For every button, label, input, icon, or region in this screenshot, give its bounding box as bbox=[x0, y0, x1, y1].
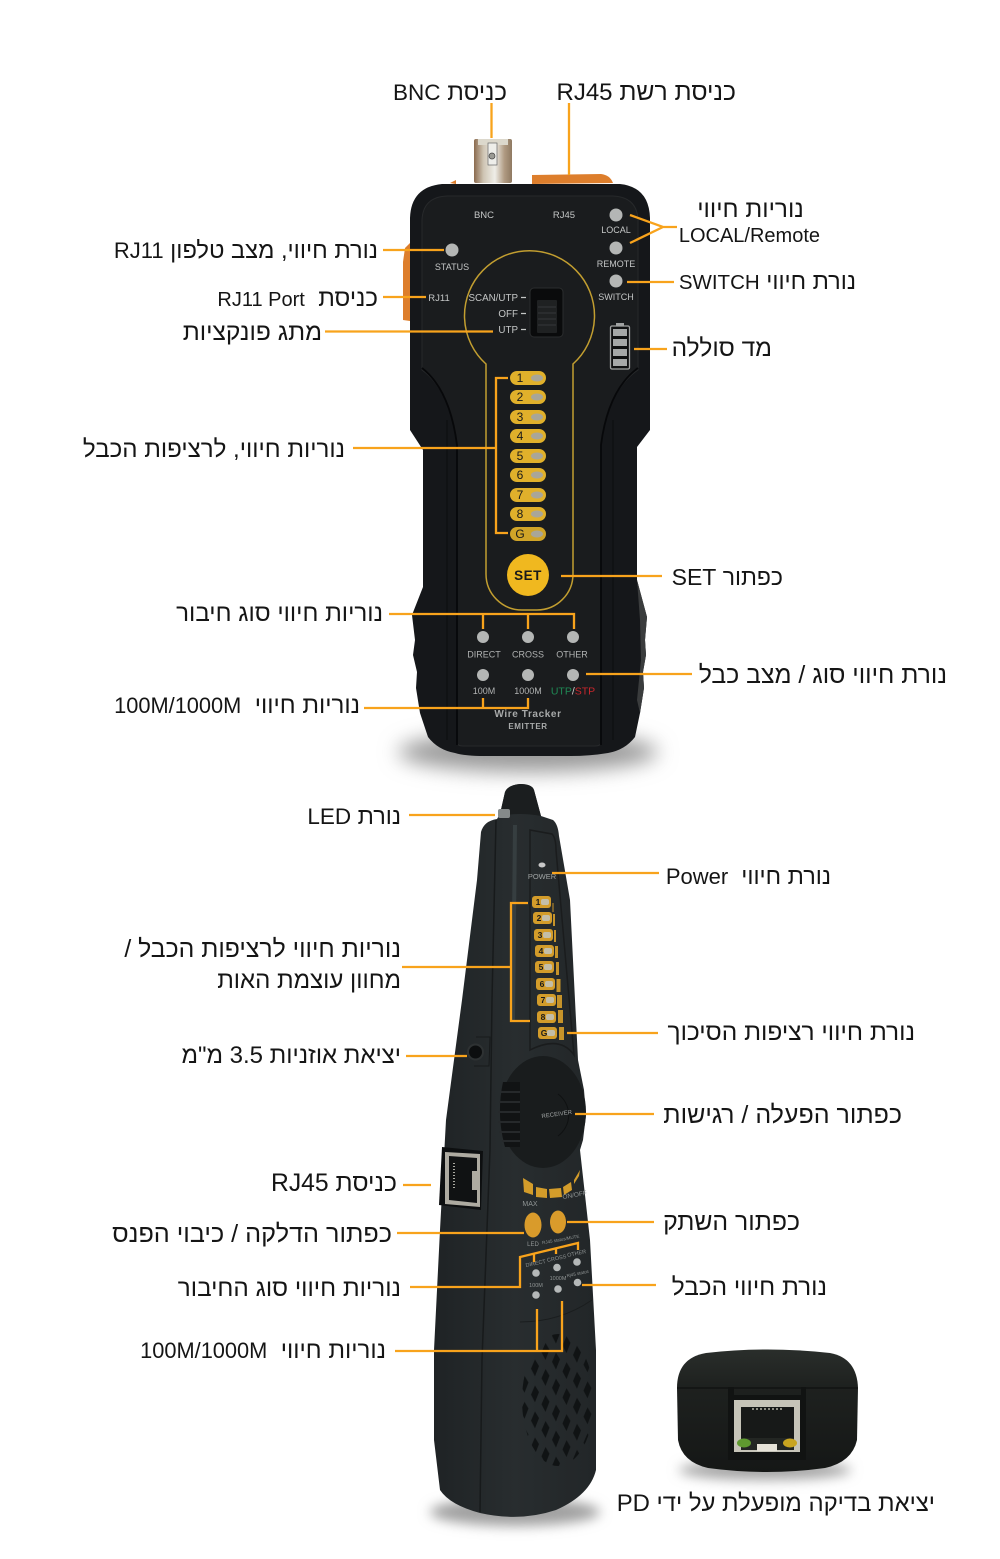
SET button bbox=[507, 554, 549, 596]
battery gauge bbox=[610, 323, 630, 369]
label: PD test output: יציאת בדיקה מופעלת על ידי PD bbox=[617, 1490, 935, 1516]
receiver control labels: 1000M bbox=[550, 1276, 567, 1282]
receiver control labels: ON/OFF bbox=[562, 1190, 587, 1201]
device labels: top: REMOTE bbox=[597, 259, 635, 269]
indicators: top LEDs bbox=[446, 208, 622, 288]
continuity LED pills: 2 bbox=[517, 390, 524, 404]
continuity LED pills: 1 bbox=[517, 371, 524, 385]
continuity LED pills: 3 bbox=[517, 410, 524, 424]
receiver control labels: CROSS bbox=[547, 1254, 567, 1264]
label: function switch: מתג פונקציות bbox=[183, 318, 322, 346]
receiver control labels: Rj45 status bbox=[566, 1269, 590, 1278]
label: cable continuity LEDs: נוריות חיווי, לרציפות הכבל bbox=[83, 436, 345, 462]
receiver control labels bbox=[522, 1190, 590, 1289]
label: power and sensitivity dial: כפתור הפעלה / רגישות bbox=[663, 1100, 902, 1128]
power dial: RECEIVER bbox=[541, 1110, 573, 1120]
body bbox=[410, 184, 650, 756]
label: SET button: כפתור SET bbox=[672, 564, 783, 590]
label: LED lamp: נורת LED bbox=[307, 802, 401, 828]
receiver LED pills: 4 bbox=[539, 946, 544, 956]
receiver LED pills: G bbox=[541, 1028, 548, 1038]
power dial bbox=[498, 1056, 586, 1168]
leader: receiver 100M/1000M bbox=[395, 1301, 562, 1351]
display plate bbox=[530, 830, 574, 1055]
device labels: top: SCAN/UTP bbox=[468, 293, 518, 304]
receiver LED pills: 7 bbox=[541, 995, 546, 1005]
signal strength bars bbox=[552, 903, 564, 1040]
label: LOCAL/Remote LEDs bbox=[679, 196, 820, 246]
device labels: top bbox=[428, 210, 635, 336]
receiver control labels: LED bbox=[527, 1242, 540, 1248]
leader: RJ45 network bbox=[568, 103, 570, 175]
receiver LED pills bbox=[532, 896, 557, 1039]
receiver LED pills: 8 bbox=[541, 1012, 546, 1022]
leader: receiver connection type bbox=[410, 1243, 578, 1287]
device labels: top: BNC bbox=[474, 210, 494, 221]
device labels: bottom: CROSS bbox=[512, 650, 544, 660]
receiver LED pills: 3 bbox=[538, 930, 543, 940]
leader: SWITCH bbox=[627, 281, 674, 283]
continuity LED pills bbox=[510, 371, 546, 541]
leader: receiver continuity bbox=[402, 903, 530, 1021]
device labels: top: STATUS bbox=[435, 262, 469, 272]
device: wire tracker receiver bbox=[430, 784, 600, 1526]
leader: receiver RJ45 bbox=[403, 1184, 431, 1186]
label: connection type LEDs: נוריות חיווי סוג החיבור bbox=[178, 1274, 401, 1302]
receiver LED pills: 1 bbox=[536, 897, 541, 907]
headphone jack bbox=[468, 1037, 490, 1066]
device labels: bottom bbox=[467, 650, 595, 731]
label: SWITCH LED: נורת חיווי SWITCH bbox=[679, 268, 856, 294]
leader: connection type bbox=[389, 614, 574, 629]
device labels: top: UTP bbox=[498, 325, 518, 336]
label: connection type LEDs: נוריות חיווי סוג חיבור bbox=[176, 600, 383, 626]
continuity LED pills: 4 bbox=[517, 429, 524, 443]
device labels: top: SWITCH bbox=[598, 292, 634, 302]
label: flashlight button: כפתור הדלקה / כיבוי הפנס bbox=[112, 1220, 392, 1248]
label: continuity and signal strength bbox=[124, 936, 401, 994]
receiver LED pills: 6 bbox=[540, 979, 545, 989]
leader: LED bbox=[409, 814, 495, 816]
label: continuity and signal strength: מחוון עוצמת האות bbox=[217, 966, 401, 994]
label: RJ45 network port: כניסת רשת RJ45 bbox=[556, 78, 736, 106]
panel line bbox=[480, 820, 496, 1512]
receiver control labels: OTHER bbox=[567, 1249, 587, 1259]
label: continuity and signal strength: נוריות חיווי לרציפות הכבל / bbox=[124, 936, 401, 962]
device labels: bottom: OTHER bbox=[556, 650, 588, 660]
label: RJ11 port: כניסת RJ11 Port bbox=[217, 284, 378, 312]
leader: mute bbox=[567, 1221, 654, 1223]
device labels: bottom: Wire Tracker bbox=[494, 709, 562, 720]
leader: headphone bbox=[406, 1055, 467, 1057]
receiver control labels: 100M bbox=[529, 1283, 543, 1289]
leader: LED button bbox=[397, 1232, 524, 1234]
power LED: POWER bbox=[528, 872, 557, 881]
label: cable type and state LED: נורת חיווי סוג / מצב כבל bbox=[699, 662, 947, 688]
label: RJ45 port: כניסת RJ45 bbox=[271, 1170, 397, 1196]
leader: RJ11 port bbox=[383, 296, 426, 298]
volume arc bbox=[523, 1170, 580, 1198]
leader: receiver cable bbox=[582, 1284, 656, 1286]
leader: RJ11 status bbox=[383, 249, 444, 251]
leader: cable state bbox=[586, 673, 692, 675]
device: PD test unit bbox=[677, 1350, 858, 1480]
receiver LEDs bbox=[532, 1258, 581, 1299]
power LED bbox=[528, 862, 557, 881]
device labels: bottom: 100M bbox=[473, 686, 495, 696]
continuity LED pills: G bbox=[515, 527, 525, 541]
leader: shield continuity bbox=[567, 1032, 658, 1034]
label: mute button: כפתור השתק bbox=[663, 1208, 800, 1236]
body bbox=[434, 784, 596, 1517]
label: battery gauge: מד סוללה bbox=[672, 334, 772, 362]
receiver control labels: RJ45 status/MUTE bbox=[542, 1234, 580, 1245]
device: wire tracker emitter bbox=[398, 139, 658, 772]
leader: battery bbox=[634, 348, 667, 350]
label: receiver 100M/1000M LEDs: נוריות חיווי 100M/1000M bbox=[140, 1336, 386, 1364]
device labels: top: LOCAL bbox=[601, 225, 631, 235]
leader: BNC bbox=[490, 103, 493, 138]
continuity LED pills: 5 bbox=[517, 449, 524, 463]
receiver LED pills: 2 bbox=[537, 913, 542, 923]
continuity LED pills: 8 bbox=[517, 507, 524, 521]
leader: Power bbox=[552, 872, 659, 874]
outline: gold keyhole bbox=[465, 251, 594, 610]
leader: SET bbox=[561, 575, 662, 577]
connector: RJ11 orange cap bbox=[403, 243, 410, 321]
label: Power LED: נורת חיווי Power bbox=[666, 862, 831, 888]
label: LOCAL/Remote LEDs: נוריות חיווי bbox=[697, 196, 804, 222]
device labels: bottom: EMITTER bbox=[508, 722, 548, 731]
label: headphone output: יציאת אוזניות 3.5 מ"מ bbox=[181, 1042, 401, 1068]
receiver control labels: MAX bbox=[522, 1201, 538, 1208]
continuity LED pills: 6 bbox=[517, 468, 524, 482]
device labels: top: RJ45 bbox=[553, 210, 575, 221]
RJ45 side port bbox=[439, 1147, 483, 1210]
buttons: LED and mute bbox=[524, 1210, 566, 1238]
device labels: bottom: UTP/STP bbox=[551, 686, 595, 698]
connector: RJ45 orange cap bbox=[450, 174, 613, 184]
receiver control labels: DIRECT bbox=[525, 1259, 547, 1269]
device labels: bottom: DIRECT bbox=[467, 650, 501, 660]
port bbox=[728, 1387, 806, 1460]
label: cable LED: נורת חיווי הכבל bbox=[672, 1274, 827, 1300]
label: BNC port: כניסת BNC bbox=[393, 78, 507, 106]
receiver LED pills: 5 bbox=[539, 962, 544, 972]
function switch bbox=[521, 288, 563, 337]
SET button: SET bbox=[514, 568, 542, 583]
continuity LED pills: 7 bbox=[517, 488, 524, 502]
leader: power dial bbox=[575, 1113, 654, 1115]
indicators: bottom LEDs bbox=[477, 631, 579, 681]
device labels: top: OFF bbox=[498, 309, 518, 320]
device labels: top: RJ11 bbox=[428, 293, 450, 304]
leader: continuity bracket bbox=[353, 378, 508, 533]
connector: BNC bbox=[474, 139, 512, 183]
device labels: bottom: 1000M bbox=[514, 686, 542, 696]
label: 100M/1000M LEDs: נוריות חיווי 100M/1000M bbox=[114, 692, 360, 718]
leader: function switch bbox=[325, 330, 493, 333]
speaker grille bbox=[522, 1334, 592, 1466]
label: LOCAL/Remote LEDs: LOCAL/Remote bbox=[679, 224, 820, 246]
leader: LOCAL/Remote bbox=[630, 215, 677, 243]
leader: 100M/1000M bbox=[364, 698, 528, 708]
label: shield continuity LED: נורת חיווי רציפות הסיכוך bbox=[667, 1018, 915, 1046]
label: RJ11 phone status LED: נורת חיווי, מצב טלפון RJ11 bbox=[114, 238, 378, 264]
